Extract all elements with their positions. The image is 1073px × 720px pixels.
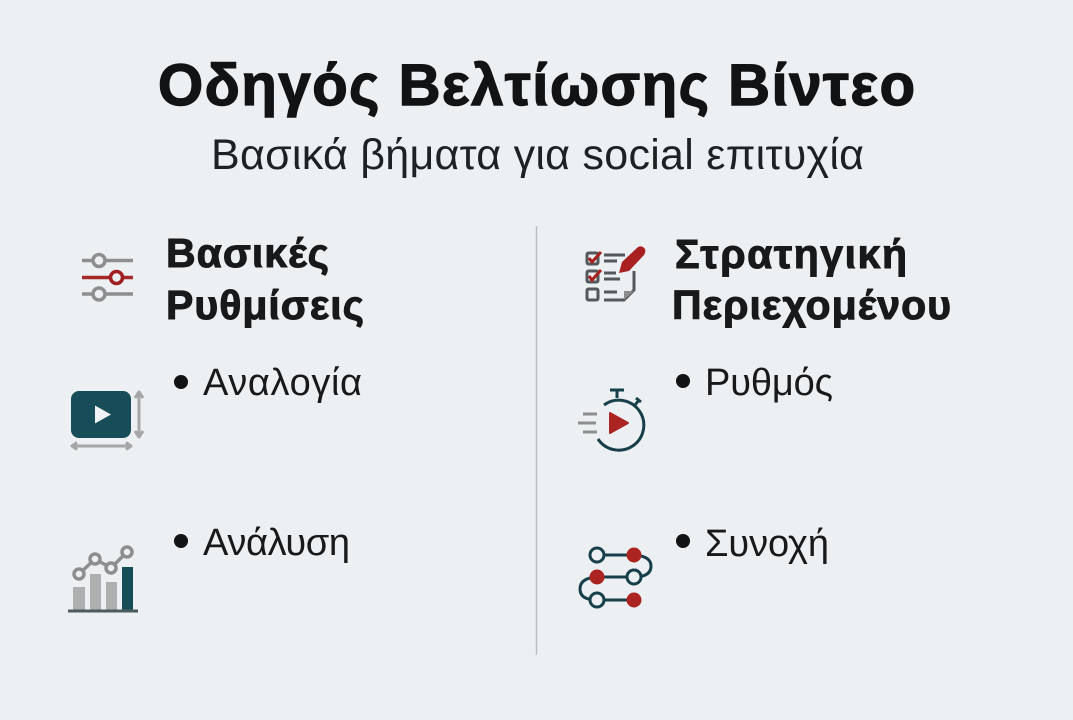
subtitle: Βασικά βήματα για social επιτυχία (211, 131, 864, 179)
icon: sliders (82, 254, 133, 300)
title: Οδηγός Βελτίωσης Βίντεο (158, 53, 915, 118)
heading: content strategy: Περιεχομένου (672, 282, 951, 328)
icon: analytics chart (68, 547, 138, 611)
heading: content strategy: Στρατηγική (675, 231, 907, 277)
bullet: pace: Ρυθμός (705, 362, 833, 404)
icon: checklist with pencil (587, 246, 645, 300)
heading: basic settings: Ρυθμίσεις (166, 282, 364, 328)
icon: stopwatch with play (578, 390, 644, 450)
panel: basic settings (68, 230, 364, 611)
icon: video aspect ratio (71, 391, 143, 450)
heading: basic settings: Βασικές (166, 230, 329, 276)
panel: content strategy (578, 231, 951, 608)
icon: consistency flow (580, 548, 651, 608)
bullet: consistency: Συνοχή (705, 523, 829, 565)
bullet: aspect ratio: Αναλογία (203, 362, 362, 404)
bullet: analysis: Ανάλυση (203, 522, 350, 564)
